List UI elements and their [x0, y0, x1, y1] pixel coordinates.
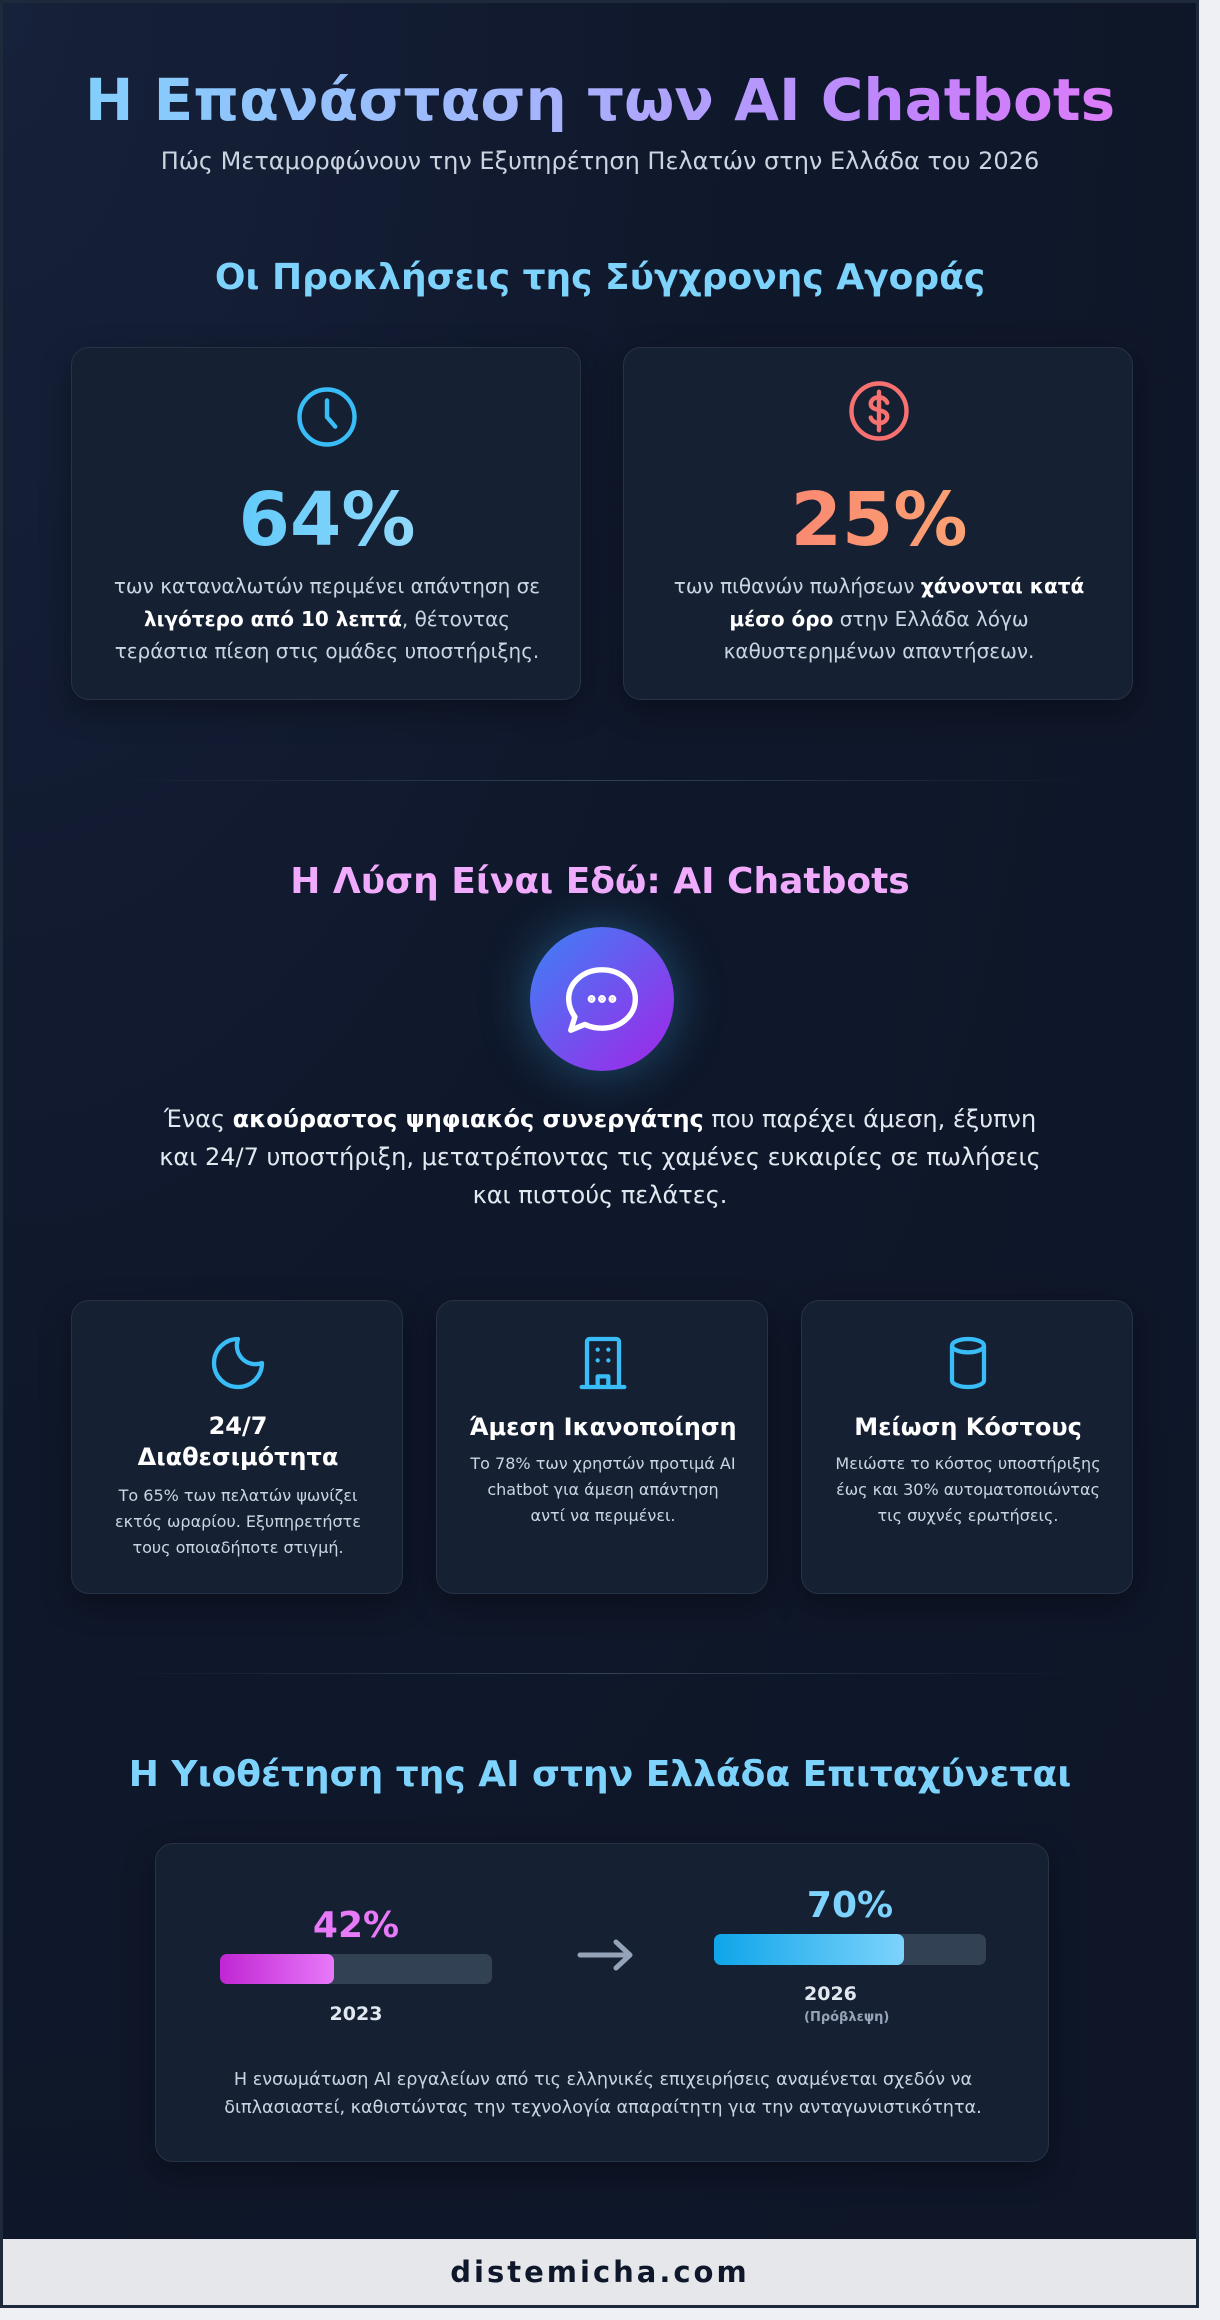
title [138, 1412, 338, 1471]
title: Η Επανάσταση των AI Chatbots [85, 66, 1115, 134]
text: αντί να περιμένει. [531, 1506, 675, 1525]
title: Άμεση Ικανοποίηση [469, 1413, 737, 1441]
stat: 25% [624, 470, 1134, 570]
caption: Η ενσωμάτωση AI εργαλείων από τις ελληνικές επιχειρήσεις αναμένεται σχεδόν να διπλασιαστεί, καθιστώντας την τεχνολογία απαραίτητη για την ανταγωνιστικότητα. [224, 2070, 982, 2118]
icon: building [580, 1336, 626, 1390]
footer [3, 2239, 1197, 2305]
icon: dollar [849, 381, 909, 441]
card: 24/7 [71, 1300, 403, 1594]
text: των καταναλωτών περιμένει απάντηση σε λιγότερο από 10 λεπτά, θέτοντας τεράστια πίεση στις ομάδες υποστήριξης. [114, 574, 540, 663]
paragraph: solution: Ένας ακούραστος ψηφιακός συνεργάτης που παρέχει άμεση, έξυπνη και 24/7 υποστήριξη, μετατρέποντας τις χαμένες ευκαιρίες σε πωλήσεις και πιστούς πελάτες. [159, 1105, 1041, 1209]
icon: chat bubble [530, 927, 674, 1071]
stat: 2026: 2026 [804, 1983, 857, 2005]
card: instant [436, 1300, 768, 1594]
heading: challenges: Οι Προκλήσεις της Σύγχρονης Αγοράς [215, 257, 985, 298]
title: Διαθεσιμότητα [138, 1443, 338, 1471]
text: των πιθανών πωλήσεων χάνονται κατά μέσο όρο στην Ελλάδα λόγω καθυστερημένων απαντήσεων. [674, 574, 1084, 663]
icon: clock [297, 387, 357, 447]
text: chatbot για άμεση απάντηση [487, 1480, 719, 1499]
arrow [578, 1940, 632, 1970]
stat: 2026 [714, 1885, 986, 2025]
icon: moon [212, 1336, 264, 1390]
text: Μειώστε το κόστος υποστήριξης έως και 30% αυτοματοποιώντας τις συχνές ερωτήσεις. [835, 1454, 1101, 1525]
title: 24/7 [209, 1412, 267, 1440]
bar 2023 [220, 1954, 492, 1984]
stat: 64% [72, 470, 582, 570]
stat: 2023 [220, 1905, 492, 2025]
heading: solution: Η Λύση Είναι Εδώ: AI Chatbots [290, 861, 910, 902]
stat: 2023: 42% [313, 1905, 399, 1946]
text: Το 65% των πελατών ψωνίζει εκτός ωραρίου. Εξυπηρετήστε τους οποιαδήποτε στιγμή. [115, 1486, 361, 1557]
stat: 64%: 64% [238, 477, 416, 563]
bar 2026 [714, 1934, 986, 1965]
icon: database [950, 1336, 986, 1390]
subtitle: Πώς Μεταμορφώνουν την Εξυπηρέτηση Πελατών στην Ελλάδα του 2026 [161, 147, 1039, 175]
stat: 2023: 2023 [330, 2003, 382, 2025]
card: cost [801, 1300, 1133, 1594]
stat: 2026: (Πρόβλεψη) [804, 2010, 889, 2025]
heading: adoption: Η Υιοθέτηση της AI στην Ελλάδα Επιταχύνεται [129, 1754, 1071, 1795]
text: Το 78% των χρηστών προτιμά AI [470, 1454, 736, 1473]
text [470, 1454, 736, 1525]
panel: adoption [155, 1843, 1049, 2162]
footer: distemicha.com [450, 2255, 750, 2289]
title: Μείωση Κόστους [854, 1413, 1082, 1441]
stat: 25%: 25% [790, 477, 968, 563]
card: 25% [623, 347, 1133, 700]
card: 64% [71, 347, 581, 700]
stat: 2026: 70% [807, 1885, 893, 1926]
